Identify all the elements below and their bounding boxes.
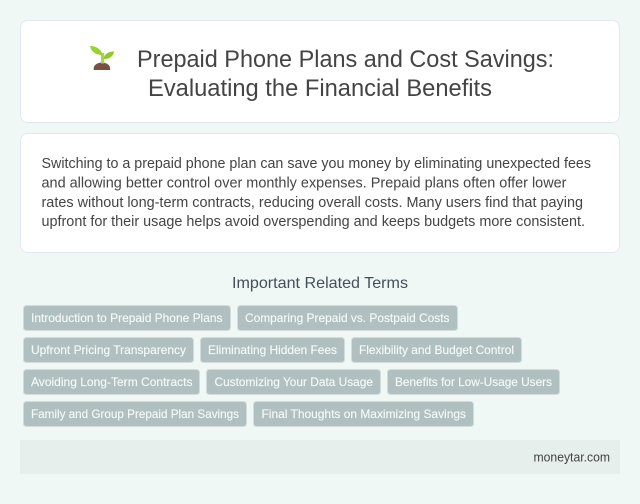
panel: summary paragraph [20, 134, 620, 252]
summary text [42, 156, 591, 230]
chip: flexibility: Flexibility and Budget Control [359, 343, 514, 357]
chip: comparing [238, 306, 458, 330]
summary text: Switching to a prepaid phone plan can save you money by eliminating unexpected fees [42, 156, 591, 172]
chip: upfront pricing: Upfront Pricing Transparency [31, 343, 186, 357]
chip: introduction [24, 306, 230, 330]
title text [137, 46, 554, 102]
heading: important related terms: Important Related Terms [232, 275, 408, 292]
footer bar [20, 440, 620, 474]
title text: Evaluating the Financial Benefits [148, 75, 492, 102]
chip: comparing: Comparing Prepaid vs. Postpaid Costs [245, 311, 450, 325]
panel: title card [20, 20, 620, 122]
chip: flexibility [352, 338, 522, 362]
chip: long-term contracts [24, 370, 200, 394]
chip: family and group [24, 402, 246, 426]
summary text: rates without long-term contracts, reducing overall costs. Many users find that paying [42, 195, 583, 211]
chip: introduction: Introduction to Prepaid Phone Plans [31, 311, 222, 325]
summary text: upfront for their usage helps avoid overspending and keeps budgets more consistent. [42, 214, 585, 230]
chip: low-usage users [388, 370, 560, 394]
chip: final thoughts [254, 402, 474, 426]
chip: data usage: Customizing Your Data Usage [214, 375, 373, 389]
summary text: and allowing better control over monthly expenses. Prepaid plans often offer lower [42, 176, 567, 192]
chip: hidden fees: Eliminating Hidden Fees [208, 343, 337, 357]
footer source: moneytar.com [534, 450, 610, 464]
chip: long-term contracts: Avoiding Long-Term Contracts [31, 375, 192, 389]
chip: family and group: Family and Group Prepaid Plan Savings [31, 407, 239, 421]
title text: Prepaid Phone Plans and Cost Savings: [137, 46, 554, 73]
chip: low-usage users: Benefits for Low-Usage Users [395, 375, 552, 389]
chip: data usage [206, 370, 380, 394]
icon: seedling [90, 46, 114, 70]
chip: upfront pricing [24, 338, 194, 362]
chip list: related terms [24, 306, 560, 426]
chip: final thoughts: Final Thoughts on Maximizing Savings [262, 407, 466, 421]
chip: hidden fees [200, 338, 344, 362]
